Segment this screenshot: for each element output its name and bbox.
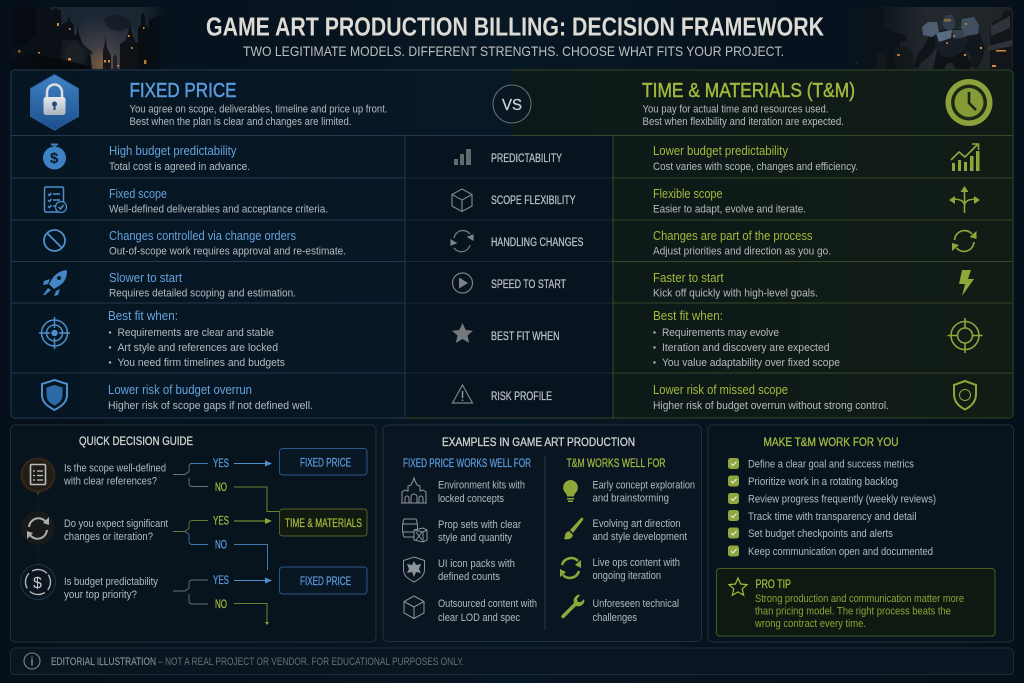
question 1: Is the scope well-defined	[64, 462, 166, 474]
heading: fixed price	[130, 80, 388, 128]
row 5: best fit: Best fit when:	[653, 309, 723, 323]
row 3: changes: HANDLING CHANGES	[491, 237, 584, 249]
row 1: predictability: Total cost is agreed in advance.	[109, 161, 250, 173]
box: fixed price: FIXED PRICE	[300, 458, 351, 470]
question 3: Is budget predictability	[64, 576, 158, 588]
icon: castle	[401, 478, 427, 503]
title: GAME ART PRODUCTION BILLING: DECISION FRAMEWORK	[206, 12, 824, 42]
box: fixed price	[280, 567, 367, 594]
icon: checklist circle	[20, 458, 56, 494]
row 2: scope	[44, 186, 980, 216]
row 2: scope: Easier to adapt, evolve and iterate.	[653, 204, 806, 216]
icon: play circle	[452, 273, 472, 293]
heading: fixed price: Best when the plan is clear and changes are limited.	[130, 116, 352, 128]
row 5: best fit: You need firm timelines and budgets	[118, 357, 285, 369]
panel: examples in game art production: FIXED PRICE WORKS WELL FOR	[403, 458, 531, 470]
row 5: best fit: BEST FIT WHEN	[491, 331, 560, 343]
icon: info	[24, 653, 40, 669]
panel: examples in game art production: UI icon packs with	[438, 558, 515, 570]
checklist: Keep communication open and documented	[748, 546, 933, 558]
box: fixed price: FIXED PRICE	[300, 576, 351, 588]
question 2: NO	[215, 540, 227, 552]
heading: time and materials: Best when flexibility and iteration are expected.	[642, 116, 844, 128]
question 1: NO	[215, 482, 227, 494]
callout: pro tip	[716, 568, 995, 636]
panel: examples in game art production: Unforeseen technical	[592, 598, 679, 610]
panel: examples in game art production: EXAMPLES IN GAME ART PRODUCTION	[442, 435, 635, 449]
icon: dollar circle: $	[33, 575, 42, 592]
row 4: speed: Kick off quickly with high-level goals.	[653, 288, 818, 300]
question 1	[20, 448, 367, 512]
icon: emblem shield	[404, 557, 424, 582]
checklist: Define a clear goal and success metrics	[748, 458, 914, 470]
row 6: risk: Lower risk of budget overrun	[108, 383, 252, 397]
icon: signal bars	[454, 149, 471, 165]
question 3: your top priority?	[64, 589, 137, 601]
row 5: best fit: Iteration and discovery are expected	[662, 342, 830, 354]
icon: checklist	[44, 187, 66, 212]
icon: branching arrows	[949, 186, 980, 213]
icon: barrel and crate	[402, 519, 427, 542]
row 1: predictability: Cost varies with scope, changes and efficiency.	[653, 161, 858, 173]
row 5: best fit: Requirements are clear and stable	[118, 327, 274, 339]
panel: examples in game art production: locked concepts	[438, 493, 504, 505]
row 3: changes: Adjust priorities and direction as you go.	[653, 246, 831, 258]
checklist: Set budget checkpoints and alerts	[748, 528, 893, 540]
heading: fixed price: You agree on scope, deliverables, timeline and price up front.	[130, 104, 388, 116]
heading: time and materials: TIME & MATERIALS (T&M)	[642, 80, 855, 102]
icon: target olive	[948, 318, 982, 353]
icon: refresh circle	[21, 511, 55, 545]
subtitle: TWO LEGITIMATE MODELS. DIFFERENT STRENGTHS. CHOOSE WHAT FITS YOUR PROJECT.	[243, 43, 784, 59]
icon: money stopwatch	[43, 144, 66, 170]
callout: pro tip: Strong production and communication matter more	[755, 593, 964, 605]
icon: rocket	[43, 270, 67, 296]
question 2	[21, 509, 367, 570]
badge: VS: VS	[502, 97, 522, 114]
heading: time and materials	[642, 80, 855, 128]
icon: lightbulb	[563, 480, 578, 502]
checklist: Prioritize work in a rotating backlog	[748, 476, 898, 488]
panel: make T&M work for you: MAKE T&M WORK FOR YOU	[764, 435, 898, 449]
illustration: gothic fantasy town banner	[10, 7, 165, 69]
row 1: predictability	[43, 144, 980, 173]
panel: quick decision guide	[10, 425, 376, 642]
icon: clock	[946, 79, 992, 126]
question 1: YES	[213, 458, 229, 470]
question 3: YES	[213, 575, 229, 587]
question 2: Do you expect significant	[64, 518, 168, 530]
box: fixed price	[280, 448, 367, 475]
question 1: with clear references?	[63, 476, 157, 488]
question 2: changes or iteration?	[64, 531, 153, 543]
icon: money stopwatch: $	[50, 150, 59, 167]
panel: examples in game art production: T&M WORKS WELL FOR	[566, 458, 666, 470]
question 3	[20, 564, 367, 625]
panel: examples in game art production: Prop sets with clear	[438, 519, 521, 531]
icon: cube outline	[452, 189, 472, 212]
icon: star outline	[729, 578, 747, 595]
panel: examples in game art production: Evolving art direction	[592, 518, 680, 530]
icon: padlock hexagon	[30, 74, 78, 130]
footer note	[10, 648, 1014, 674]
row 5: best fit: Best fit when:	[108, 309, 178, 323]
heading: fixed price: FIXED PRICE	[130, 80, 236, 102]
panel: examples in game art production: Outsourced content with	[438, 598, 537, 610]
row 2: scope: Well-defined deliverables and acceptance criteria.	[109, 204, 328, 216]
icon: dollar circle	[20, 564, 56, 600]
question 3: NO	[215, 599, 227, 611]
icon: box	[404, 596, 424, 618]
row 4: speed: Faster to start	[653, 271, 724, 285]
icon: paintbrush	[564, 518, 583, 539]
row 3: changes	[44, 229, 976, 258]
row 4: speed	[43, 270, 974, 300]
box: time and materials: TIME & MATERIALS	[285, 518, 362, 530]
icon: shield olive	[954, 381, 976, 410]
icon: warning triangle	[452, 385, 472, 403]
box: time and materials	[280, 509, 367, 536]
icon: target blue	[39, 317, 70, 349]
icon: cycle arrows	[560, 558, 581, 578]
callout: pro tip: PRO TIP	[756, 579, 791, 591]
row 5: best fit: Requirements may evolve	[662, 327, 779, 339]
callout: pro tip: wrong contract every time.	[754, 618, 866, 630]
row 1: predictability: PREDICTABILITY	[491, 153, 562, 165]
row 3: changes: Changes controlled via change orders	[109, 229, 296, 243]
panel: make T&M work for you	[708, 425, 1014, 642]
checklist	[728, 458, 936, 558]
row 3: changes: Changes are part of the process	[653, 229, 812, 243]
panel: time and materials side	[512, 70, 1013, 418]
panel: examples in game art production: defined counts	[438, 571, 500, 583]
panel: examples in game art production: and style development	[592, 531, 687, 543]
icon: prohibited	[44, 230, 65, 251]
callout: pro tip: than pricing model. The right process beats the	[755, 606, 951, 618]
row 5: best fit: Art style and references are locked	[118, 342, 278, 354]
panel: examples in game art production: ongoing iteration	[592, 570, 661, 582]
row 6: risk	[42, 380, 976, 412]
row 2: scope: Fixed scope	[109, 187, 167, 201]
panel: examples in game art production: and brainstorming	[592, 492, 669, 504]
icon: wrench	[561, 595, 584, 618]
row 6: risk: RISK PROFILE	[491, 391, 552, 403]
heading: time and materials: You pay for actual time and resources used.	[642, 104, 828, 116]
icon: rising chart	[951, 144, 980, 171]
footer note: EDITORIAL ILLUSTRATION	[51, 656, 156, 668]
icon: shield blue	[42, 380, 67, 410]
row 5: best fit	[39, 309, 982, 369]
checklist: Track time with transparency and detail	[748, 511, 916, 523]
row 4: speed: Slower to start	[109, 271, 182, 285]
icon: lightning	[959, 270, 974, 296]
row 3: changes: Out-of-scope work requires approval and re-estimate.	[109, 246, 346, 258]
badge: VS	[493, 85, 531, 123]
panel: fixed price side	[11, 70, 512, 418]
row 1: predictability: High budget predictability	[109, 144, 237, 158]
panel: examples in game art production: Live ops content with	[592, 557, 680, 569]
row 6: risk: Higher risk of budget overrun without strong control.	[653, 400, 889, 412]
panel: examples in game art production: style and quantity	[438, 532, 512, 544]
panel: examples in game art production: Early concept exploration	[592, 480, 695, 492]
icon: star grey	[452, 323, 473, 343]
panel: examples in game art production: clear LOD and spec	[438, 612, 520, 624]
row 4: speed: Requires detailed scoping and estimation.	[109, 288, 296, 300]
row 1: predictability: Lower budget predictability	[653, 144, 789, 158]
row 4: speed: SPEED TO START	[491, 279, 566, 291]
panel: examples in game art production: challenges	[592, 612, 637, 624]
row 6: risk: Lower risk of missed scope	[653, 383, 788, 397]
panel: quick decision guide: QUICK DECISION GUIDE	[79, 434, 193, 448]
comparison table	[11, 70, 1013, 418]
icon: refresh grey	[451, 230, 473, 252]
row 6: risk: Higher risk of scope gaps if not defined well.	[108, 400, 313, 412]
panel: examples in game art production	[383, 425, 702, 642]
panel: examples in game art production: Environment kits with	[438, 480, 525, 492]
row 2: scope: Flexible scope	[653, 187, 723, 201]
footer note: – NOT A REAL PROJECT OR VENDOR. FOR EDUCATIONAL PURPOSES ONLY.	[158, 656, 464, 668]
illustration: mech robot banner	[850, 7, 1013, 69]
checklist: Review progress frequently (weekly reviews)	[748, 494, 936, 506]
question 2: YES	[213, 516, 229, 528]
icon: refresh olive	[952, 231, 976, 251]
row 2: scope: SCOPE FLEXIBILITY	[491, 195, 576, 207]
row 5: best fit: You value adaptability over fixed scope	[662, 357, 840, 369]
mech arms and legs	[913, 34, 940, 69]
